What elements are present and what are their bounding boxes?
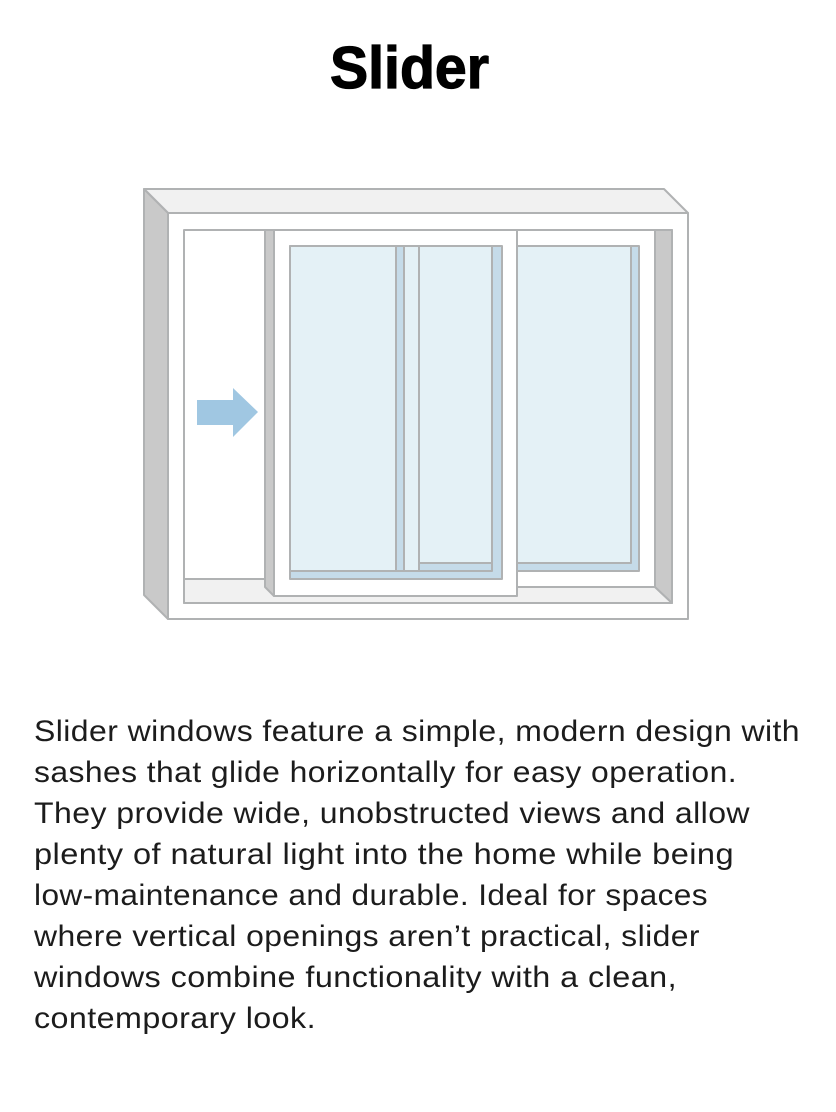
right jamb [655, 230, 672, 603]
description text: contemporary look. [34, 1002, 316, 1035]
outer frame top face [144, 189, 688, 213]
description text: low-maintenance and durable. Ideal for spaces [34, 879, 708, 912]
window opening [184, 230, 672, 603]
description text: Slider windows feature a simple, modern design with [34, 715, 800, 748]
title: Slider [330, 35, 489, 101]
sliding sash [274, 230, 517, 596]
description text: plenty of natural light into the home while being [34, 838, 734, 871]
description text [33, 715, 800, 1035]
sill [184, 579, 672, 603]
description text: windows combine functionality with a clean, [33, 961, 677, 994]
fixed sash glass [510, 246, 639, 571]
sliding sash side [265, 230, 274, 596]
window illustration [144, 189, 688, 619]
outer frame left face [144, 189, 168, 619]
outer frame front [168, 213, 688, 619]
sliding sash glass [290, 246, 502, 579]
description text: where vertical openings aren’t practical, slider [33, 920, 700, 953]
arrow [197, 388, 258, 437]
description text: sashes that glide horizontally for easy operation. [34, 756, 737, 789]
description text: They provide wide, unobstructed views and allow [34, 797, 750, 830]
